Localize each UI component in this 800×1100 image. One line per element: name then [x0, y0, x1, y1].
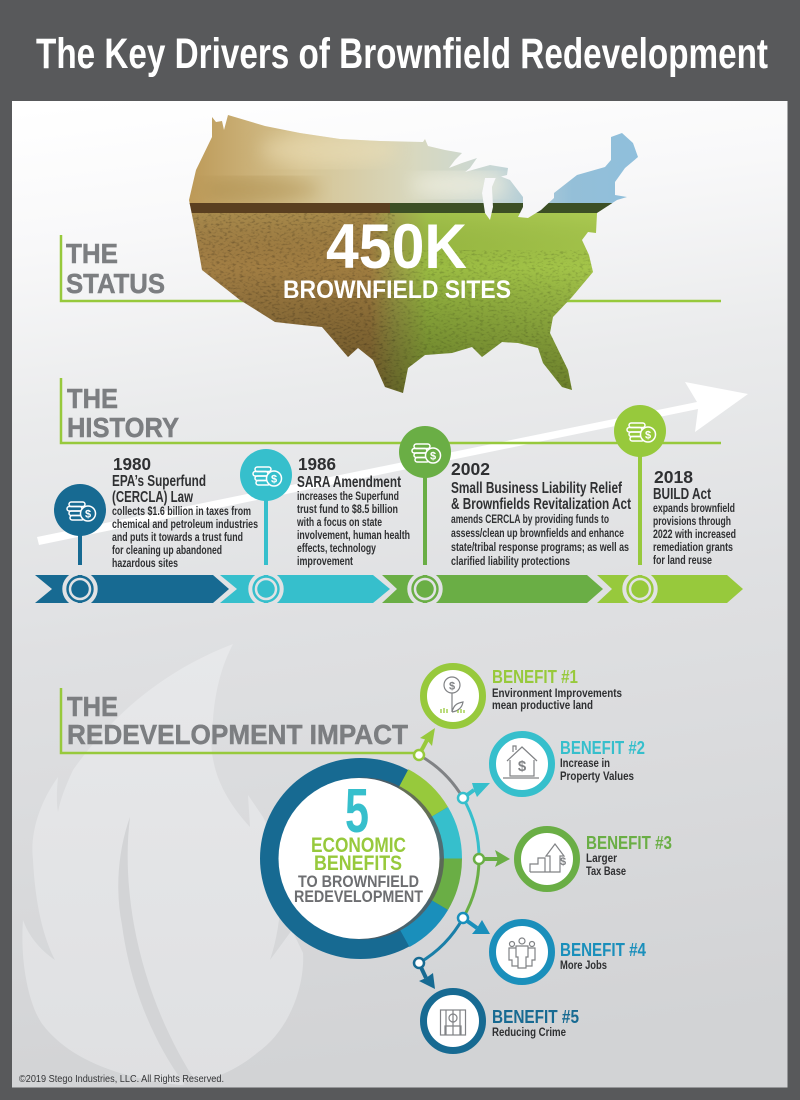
benefit 5 text	[492, 1007, 579, 1039]
arrow to benefit 3	[474, 850, 510, 867]
icon: prison bars	[424, 992, 482, 1050]
donut segment teal	[428, 807, 462, 858]
benefit 3 text: BENEFIT #3	[586, 833, 672, 853]
history text: 1980: and puts it towards a trust fund	[112, 532, 243, 544]
benefit 2 text: Increase in	[560, 756, 610, 770]
history text: 1986: involvement, human health	[297, 530, 410, 542]
section: the redevelopment impact heading	[61, 688, 419, 753]
history text: 2018	[653, 467, 736, 567]
history text: 2002: state/tribal response programs; as well as	[451, 542, 629, 554]
history text: 2002: & Brownfields Revitalization Act	[451, 496, 631, 513]
history text: 1980: chemical and petroleum industries	[112, 519, 258, 531]
icon: money flower: $	[449, 680, 455, 692]
icon: house: $	[518, 758, 527, 775]
icon: money flower	[424, 666, 482, 726]
segment 2002	[382, 575, 603, 603]
benefit 4 text: BENEFIT #4	[560, 940, 646, 960]
node 2002	[409, 574, 441, 604]
benefit 1 text: mean productive land	[492, 698, 593, 712]
history text: 1986: trust fund to $8.5 billion	[297, 504, 398, 516]
connector arc with arrows	[414, 728, 510, 989]
section: the status	[61, 235, 721, 301]
history text: 1986: effects, technology	[297, 543, 376, 555]
benefit 4	[492, 922, 646, 982]
node 1980	[64, 574, 96, 604]
history text: 1986: 1986	[298, 454, 336, 474]
stat: 450K brownfield sites	[283, 212, 511, 304]
benefit 1 text: BENEFIT #1	[492, 667, 578, 687]
timeline band	[35, 574, 743, 604]
donut centre text: ECONOMIC	[311, 834, 406, 857]
history text: 1980: hazardous sites	[112, 558, 178, 570]
history text: 2002: Small Business Liability Relief	[451, 480, 623, 497]
arrow to benefit 4	[458, 913, 490, 934]
node 2018	[624, 574, 656, 604]
pin: 1980 coins: $	[85, 508, 91, 520]
icon: people	[492, 922, 552, 982]
history text: 2018: expands brownfield	[653, 503, 735, 515]
benefit 2 text: BENEFIT #2	[560, 738, 645, 758]
benefit 3	[518, 830, 672, 888]
section: the history heading	[61, 378, 721, 443]
benefit 1 text: Environment Improvements	[492, 686, 622, 700]
icon: rising bars	[518, 830, 576, 888]
benefit 5	[424, 992, 579, 1050]
benefit 1 text	[492, 667, 622, 712]
donut centre text: 5	[345, 777, 369, 846]
history text: 1980: for cleaning up abandoned	[112, 545, 222, 557]
donut segment lime	[398, 769, 448, 819]
benefit 5 text: Reducing Crime	[492, 1025, 566, 1039]
donut centre text: BENEFITS	[314, 852, 402, 875]
benefit 4 text: More Jobs	[560, 958, 607, 972]
node 1986	[250, 574, 282, 604]
donut centre text	[294, 777, 423, 906]
status heading: THE	[66, 238, 118, 269]
section: the redevelopment impact heading: REDEVELOPMENT IMPACT	[67, 719, 408, 750]
icon: house	[492, 734, 552, 794]
benefit 2 text	[560, 738, 645, 783]
benefit 2	[492, 734, 645, 794]
arrow: rising white trend	[37, 382, 748, 545]
stat: 450K brownfield sites: 450K	[326, 212, 467, 282]
arrow to benefit 2	[458, 783, 490, 803]
segment 1980	[35, 575, 229, 603]
donut centre text: TO BROWNFIELD	[298, 873, 419, 891]
arrow to benefit 5	[414, 958, 435, 989]
stat: 450K brownfield sites: BROWNFIELD SITES	[283, 276, 511, 304]
status heading	[66, 238, 165, 299]
section: the history heading: HISTORY	[67, 412, 179, 443]
benefit 3 text: Larger	[586, 851, 617, 865]
benefit 3 text: Tax Base	[586, 864, 626, 878]
segment 2018	[597, 575, 743, 603]
pin: 2018 coins: $	[645, 430, 651, 442]
benefit 1	[424, 666, 622, 726]
history text: 1980: collects $1.6 billion in taxes from	[112, 506, 251, 518]
icon: rising bars: $	[560, 856, 566, 868]
history text: 1980: 1980	[113, 454, 151, 474]
arrow to benefit 1	[414, 728, 435, 760]
benefit 3 text	[586, 833, 672, 878]
history text: 2002: clarified liability protections	[451, 556, 570, 568]
history text: 2002: 2002	[451, 459, 490, 479]
pin: 1986 coins: $	[271, 474, 277, 486]
donut centre text: REDEVELOPMENT	[294, 888, 423, 906]
pin: 2002 coins	[399, 426, 451, 565]
pin: 2018 coins	[614, 405, 666, 565]
pin: 1980 coins	[54, 484, 106, 565]
history text: 1986: with a focus on state	[296, 517, 382, 529]
benefit 2 text: Property Values	[560, 769, 634, 783]
history text: 1986: SARA Amendment	[297, 474, 401, 491]
status heading: STATUS	[66, 268, 165, 299]
history text: 1980	[112, 454, 258, 570]
pin: 2002 coins: $	[430, 450, 436, 462]
history text: 1980: EPA’s Superfund	[112, 473, 206, 490]
flame watermark	[22, 644, 303, 1085]
history text: 2002	[451, 459, 631, 568]
history text: 2002: amends CERCLA by providing funds to	[451, 514, 609, 526]
history text: 2018: remediation grants	[653, 542, 733, 554]
history text: 2018: provisions through	[653, 516, 731, 528]
segment 1986	[220, 575, 390, 603]
status rule	[61, 235, 721, 301]
history text: 2018: for land reuse	[653, 555, 712, 567]
history text: 1986	[296, 454, 410, 568]
history text: 1986: increases the Superfund	[297, 491, 399, 503]
section: the history heading: THE	[67, 383, 118, 414]
history text: 2018: 2022 with increased	[653, 529, 736, 541]
section: the redevelopment impact heading: THE	[67, 691, 118, 722]
donut: five economic benefits	[260, 758, 462, 959]
history text: 2018: 2018	[654, 467, 693, 487]
footer copyright: ©2019 Stego Industries, LLC. All Rights Reserved.	[19, 1074, 224, 1085]
history text: 1980: (CERCLA) Law	[112, 489, 194, 506]
history text: 2002: assess/clean up brownfields and enhance	[451, 528, 624, 540]
donut segment blue	[398, 898, 448, 947]
map: usa brownfield to green field	[185, 110, 645, 398]
benefit 4 text	[560, 940, 646, 972]
donut segment green	[428, 858, 462, 910]
history text: 2018: BUILD Act	[653, 486, 711, 503]
pin: 1986 coins	[240, 449, 292, 565]
benefit 5 text: BENEFIT #5	[492, 1007, 579, 1027]
history text: 1986: improvement	[297, 556, 353, 568]
